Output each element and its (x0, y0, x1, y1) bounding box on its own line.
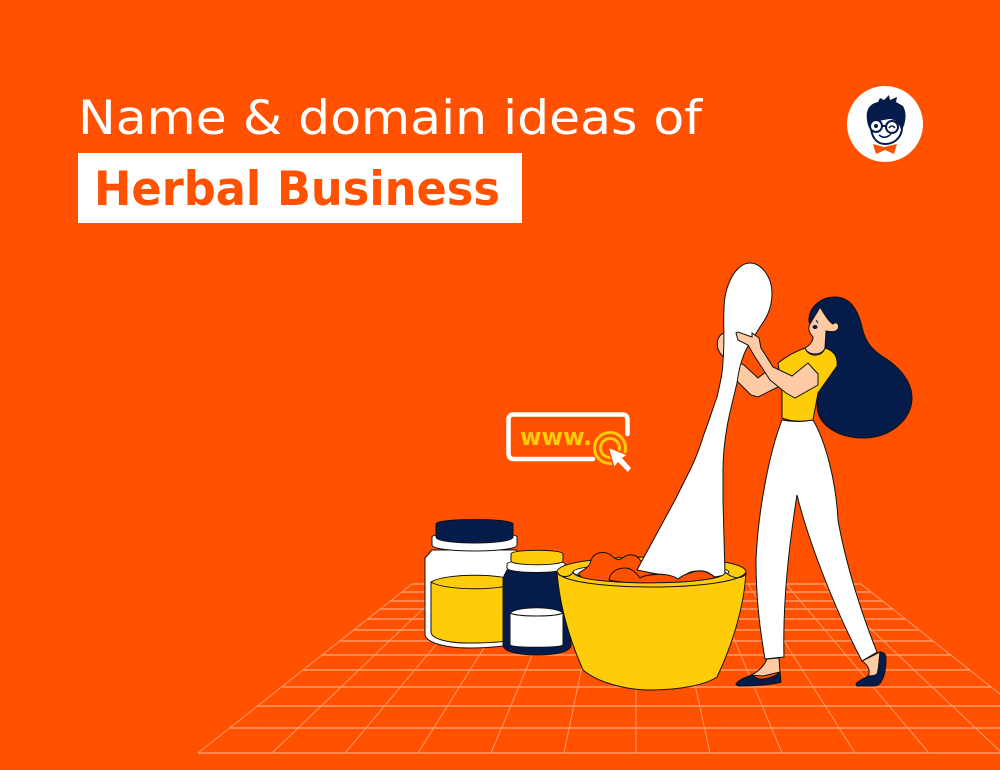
hair (809, 297, 912, 438)
far arm behind the pestle (725, 358, 780, 397)
mortar rim highlight (557, 572, 746, 587)
small navy jar with white label (503, 550, 571, 655)
large jar with yellow contents (425, 520, 520, 648)
herbs inside the mortar (578, 552, 655, 584)
icon: logo mascot with glasses and bow tie (847, 86, 923, 162)
perspective floor grid (198, 584, 1000, 753)
far hand behind the pestle (717, 333, 728, 357)
shirt (778, 348, 837, 421)
www address bar icon with cursor (508, 414, 632, 473)
highlighted title: Herbal Business: Herbal Business (94, 162, 500, 217)
title line: Name & domain ideas of: Name & domain ideas of (78, 91, 704, 146)
woman holding the pestle (736, 297, 912, 661)
front herbs in mortar (609, 568, 717, 584)
mouth and eye (812, 320, 818, 329)
left foot and shoe (736, 658, 781, 686)
www address bar icon with cursor: www. (520, 423, 592, 451)
near arm and hand (736, 332, 818, 398)
mortar bowl back rim (557, 557, 746, 588)
face and neck (805, 307, 839, 354)
trousers (756, 420, 877, 661)
right foot and shoe (856, 652, 886, 686)
mortar bowl front (557, 572, 746, 690)
pestle (637, 263, 772, 580)
